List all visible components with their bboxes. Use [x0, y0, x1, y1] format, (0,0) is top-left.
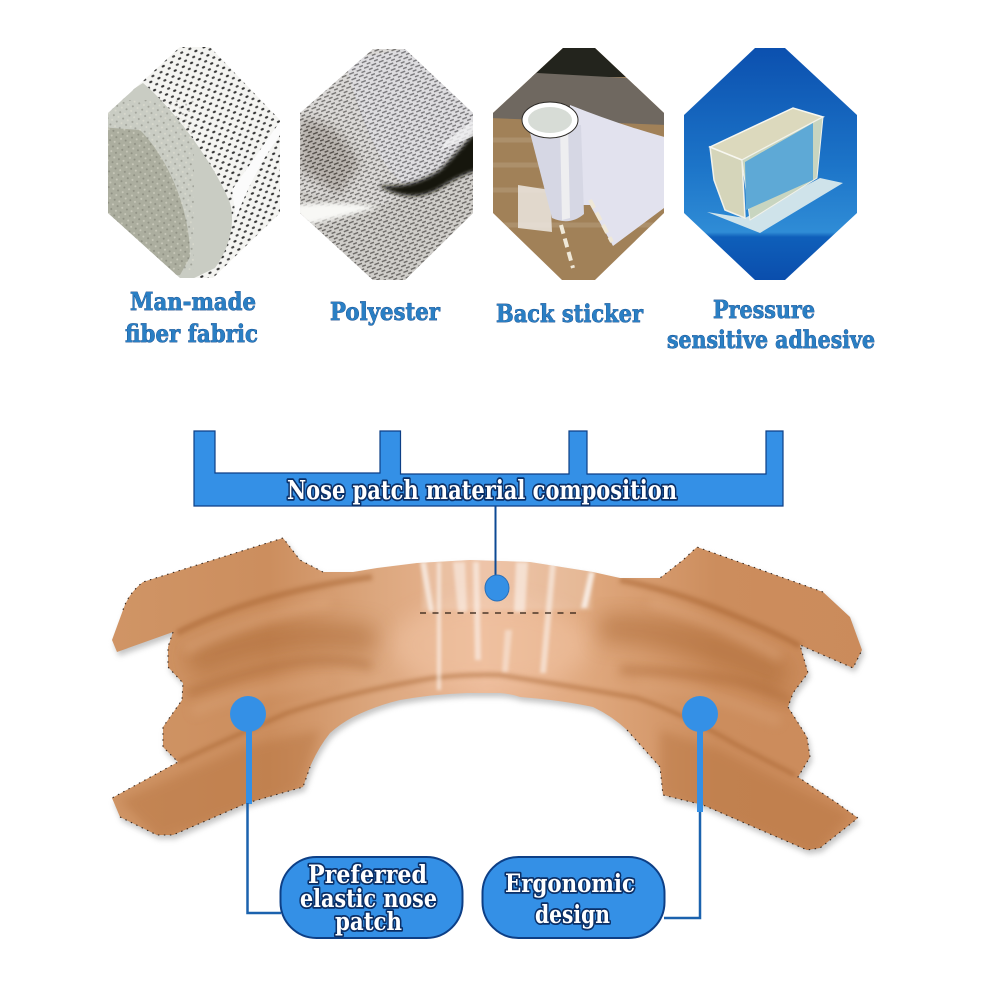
swatch: polyester	[295, 45, 480, 285]
pill: preferred elastic nose patch: elastic nose	[300, 884, 437, 913]
patch shadow	[114, 542, 864, 854]
patch edge speckle	[112, 538, 862, 850]
panel: man-made fiber fabric	[108, 47, 280, 343]
label: back sticker: Back sticker	[496, 299, 643, 328]
pill: preferred elastic nose patch: patch	[335, 907, 402, 936]
pill: preferred elastic nose patch: Preferred	[308, 860, 427, 889]
dashed stitch line	[420, 612, 578, 614]
pill: preferred elastic nose patch	[280, 857, 462, 938]
adhesive block front	[742, 117, 823, 220]
connector: right dot to ergonomic design pill	[664, 696, 718, 918]
panel: back sticker	[490, 45, 668, 328]
panel: polyester	[295, 45, 480, 326]
label: polyester: Polyester	[330, 297, 440, 326]
label: man-made fiber fabric: fiber fabric	[125, 319, 258, 348]
label: man-made fiber fabric: Man-made	[130, 287, 256, 316]
label: pressure sensitive adhesive: Pressure	[713, 295, 815, 324]
bracket: nose patch material composition: Nose patch material composition	[287, 476, 677, 506]
bracket: nose patch material composition	[194, 431, 783, 506]
swatch: pressure sensitive adhesive	[680, 45, 860, 285]
pill: ergonomic design: Ergonomic	[505, 869, 635, 898]
adhesive block base	[707, 178, 843, 233]
connector: left dot to preferred elastic patch pill	[230, 696, 281, 913]
pill: ergonomic design: design	[535, 900, 610, 929]
connector: centre dot to bracket	[485, 506, 509, 601]
swatch: back sticker	[490, 45, 668, 285]
patch body	[100, 530, 870, 860]
adhesive block top	[710, 108, 823, 160]
swatch: man-made fiber fabric	[108, 47, 280, 278]
label: man-made fiber fabric	[125, 287, 258, 348]
pale top band	[422, 556, 592, 610]
panel: pressure sensitive adhesive	[667, 45, 875, 354]
nose patch	[100, 530, 870, 860]
white streaks	[420, 562, 595, 690]
pill: ergonomic design	[482, 857, 664, 938]
label: pressure sensitive adhesive: sensitive adhesive	[667, 325, 875, 354]
adhesive block side	[710, 147, 745, 218]
label: pressure sensitive adhesive	[667, 295, 875, 354]
